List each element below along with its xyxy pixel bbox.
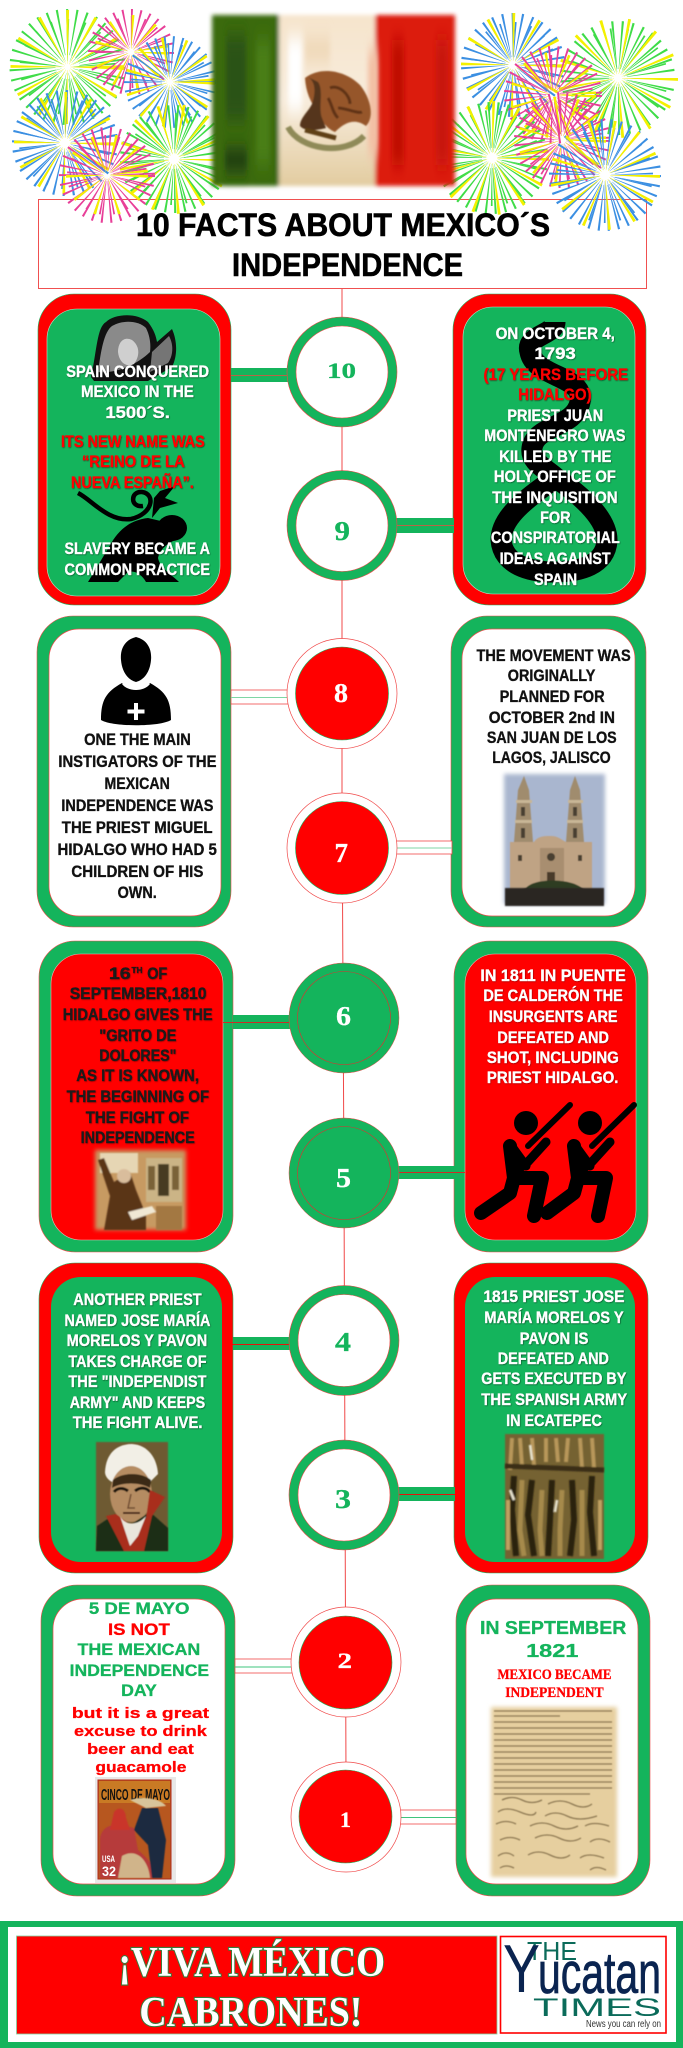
text: Juan Montenegro: CONSPIRATORIAL [491, 529, 620, 547]
image: act of independence document [491, 1707, 617, 1877]
text: Juan Montenegro: THE INQUISITION [492, 489, 618, 507]
text: September 1821: 1821 [526, 1640, 578, 1661]
badge: 5: 5 [336, 1163, 351, 1193]
connector: 1 [394, 1810, 456, 1824]
text: September 1821: IN SEPTEMBER [480, 1617, 626, 1638]
text: Spain conquered: SLAVERY BECAME A [64, 540, 210, 558]
text: Juan Montenegro: 1793 [534, 345, 576, 363]
title box [38, 200, 646, 288]
panel: fact 5 [454, 941, 648, 1252]
text: Juan Montenegro [484, 325, 628, 589]
image: Cinco de Mayo stamp [95, 1777, 176, 1883]
text: 5 de Mayo: excuse to drink [74, 1723, 208, 1740]
text: Grito de Dolores: THE FIGHT OF [86, 1109, 189, 1127]
text: Miguel Hidalgo: INDEPENDENCE WAS [61, 797, 213, 815]
text: Spain conquered: MEXICO IN THE [81, 383, 194, 401]
image: Cinco de Mayo stamp: 32 [102, 1863, 116, 1879]
text: Miguel Hidalgo: OWN. [118, 884, 157, 902]
text: Spain conquered: SPAIN CONQUERED [66, 363, 209, 381]
text: 5 de Mayo: THE MEXICAN [78, 1641, 200, 1659]
panel: fact 9 [453, 294, 646, 605]
connector: 2 [235, 1659, 297, 1673]
text: 5 de Mayo: INDEPENDENCE [70, 1662, 209, 1680]
text: Spain conquered: “REINO DE LA [82, 453, 185, 471]
icon: priest [101, 637, 171, 725]
icon: noose [501, 322, 607, 572]
text: Miguel Hidalgo [58, 731, 217, 902]
panel: fact 1 [456, 1585, 650, 1896]
badge: 10: 10 [327, 358, 356, 383]
text: Morelos takes charge: NAMED JOSE MARÍA [64, 1311, 210, 1330]
text: Morelos takes charge: ARMY" AND KEEPS [70, 1394, 205, 1412]
logo: The Yucatan Times: TIMES [533, 1994, 661, 2022]
text: Morelos takes charge: TAKES CHARGE OF [68, 1353, 207, 1371]
text: Juan Montenegro: KILLED BY THE [499, 448, 612, 466]
text: original plan: ORIGINALLY [508, 667, 595, 685]
badge: 1 [291, 1762, 401, 1872]
text: Miguel Hidalgo: HIDALGO WHO HAD 5 [58, 841, 217, 859]
text: Puente de Calderón: SHOT, INCLUDING [487, 1049, 619, 1067]
text: Juan Montenegro: PRIEST JUAN [507, 407, 603, 425]
text: Miguel Hidalgo: INSTIGATORS OF THE [58, 753, 217, 771]
text: Grito de Dolores: INDEPENDENCE [81, 1129, 195, 1147]
badge: 7 [287, 793, 397, 903]
panel: fact 3 [454, 1263, 648, 1573]
icon: kneeling riflemen [481, 1105, 634, 1216]
image: cathedral of San Juan de los Lagos [504, 774, 605, 906]
text: Puente de Calderón: INSURGENTS ARE [489, 1008, 618, 1026]
text: 5 de Mayo: IS NOT [108, 1621, 170, 1639]
text: original plan: PLANNED FOR [500, 688, 605, 706]
banner: red slogan panel: CABRONES! [139, 1990, 362, 2036]
text: Grito de Dolores: 16 [109, 965, 131, 983]
text: Juan Montenegro: IDEAS AGAINST [500, 550, 611, 568]
text: Morelos executed: MARÍA MORELOS Y [484, 1308, 624, 1327]
badge: 4: 4 [335, 1327, 351, 1357]
text: Juan Montenegro: FOR [540, 509, 571, 527]
text: 5 de Mayo: but it is a great [72, 1705, 209, 1722]
title: 10 FACTS ABOUT MEXICO´S [136, 207, 550, 243]
badge: 8: 8 [334, 678, 348, 708]
text: Morelos executed: GETS EXECUTED BY [481, 1370, 626, 1388]
badge: 3 [289, 1440, 399, 1550]
logo: The Yucatan Times: THE [527, 1936, 577, 1966]
text: Morelos executed [481, 1288, 627, 1430]
image: Hidalgo painting [95, 1150, 186, 1230]
text: Grito de Dolores: SEPTEMBER,1810 [70, 985, 206, 1003]
text: Puente de Calderón [480, 967, 626, 1087]
connector: 7 [393, 841, 452, 854]
connector: 3 [390, 1487, 465, 1501]
badge: 3: 3 [335, 1484, 351, 1514]
text: Puente de Calderón: DE CALDERÓN THE [483, 986, 623, 1005]
badge: 2 [291, 1607, 401, 1717]
connector: 8 [231, 690, 290, 704]
logo: The Yucatan Times [500, 1931, 666, 2033]
text: September 1821 [480, 1617, 626, 1701]
text: original plan: THE MOVEMENT WAS [476, 647, 631, 665]
panel: fact 2 [41, 1585, 235, 1896]
connector: 9 [388, 518, 454, 533]
text: September 1821: MEXICO BECAME [497, 1667, 612, 1683]
text: Juan Montenegro: MONTENEGRO WAS [484, 427, 625, 445]
text: Puente de Calderón: PRIEST HIDALGO. [487, 1069, 618, 1087]
text: Spain conquered: 1500´S. [105, 404, 170, 422]
title [136, 207, 550, 283]
panel: fact 8 [37, 616, 231, 927]
text: Spain conquered [61, 363, 210, 579]
badge: 1: 1 [340, 1807, 351, 1832]
badge: 4 [289, 1286, 399, 1396]
image: painted Mexican flag [212, 15, 455, 186]
text: Miguel Hidalgo: ONE THE MAIN [84, 731, 191, 749]
text: Juan Montenegro: ON OCTOBER 4, [496, 325, 615, 343]
text: Grito de Dolores: AS IT IS KNOWN, [76, 1067, 199, 1085]
badge: 5 [289, 1118, 399, 1228]
logo: The Yucatan Times: Y [503, 1931, 540, 2007]
badge: 9 [287, 470, 397, 580]
connector: 10 [231, 368, 289, 382]
icon: slave and whip [78, 486, 187, 582]
connector: 5 [391, 1166, 465, 1179]
text: Grito de Dolores: HIDALGO GIVES THE [63, 1006, 213, 1024]
text: Morelos executed: IN ECATEPEC [506, 1412, 602, 1430]
text: 5 de Mayo: 5 DE MAYO [89, 1600, 190, 1618]
badge: 8 [287, 638, 397, 748]
text: original plan: SAN JUAN DE LOS [487, 729, 617, 747]
badge: 7: 7 [334, 838, 348, 868]
footer banner [0, 1921, 683, 2048]
badge: 6: 6 [336, 1001, 351, 1031]
fireworks left [32, 27, 206, 202]
text: Morelos executed: PAVON IS [520, 1330, 588, 1348]
text: 5 de Mayo [70, 1600, 209, 1776]
panel: fact 10 [38, 294, 231, 605]
text: 5 de Mayo: beer and eat [87, 1741, 194, 1758]
text: Miguel Hidalgo: CHILDREN OF HIS [71, 863, 203, 881]
text: September 1821: INDEPENDENT [505, 1685, 604, 1701]
text: Spain conquered: COMMON PRACTICE [64, 561, 210, 579]
text: Miguel Hidalgo: MEXICAN [104, 775, 170, 793]
text: Spain conquered: NUEVA ESPAÑA”. [71, 472, 194, 492]
text: Miguel Hidalgo: THE PRIEST MIGUEL [62, 819, 212, 837]
text: Morelos takes charge [64, 1291, 210, 1432]
text: Grito de Dolores [63, 965, 213, 1147]
image: Cinco de Mayo stamp: USA [102, 1854, 115, 1864]
image: Cinco de Mayo stamp: CINCO DE MAYO [101, 1787, 170, 1804]
banner: red slogan panel [16, 1936, 497, 2036]
connector: 6 [223, 1015, 297, 1029]
text: original plan: LAGOS, JALISCO [492, 749, 611, 767]
text: Morelos takes charge: MORELOS Y PAVON [67, 1332, 207, 1350]
text: Grito de Dolores: TH [132, 966, 143, 975]
banner: red slogan panel: ¡VIVA MÉXICO [118, 1939, 385, 1986]
text: Puente de Calderón: DEFEATED AND [497, 1029, 609, 1047]
text: 5 de Mayo: guacamole [95, 1759, 186, 1776]
panel: fact 4 [39, 1263, 233, 1573]
timeline line [342, 289, 346, 1780]
text: Morelos takes charge: THE "INDEPENDIST [68, 1373, 207, 1391]
fireworks right [459, 35, 651, 208]
logo: The Yucatan Times: News you can rely on [586, 2019, 661, 2030]
text: Juan Montenegro: (17 YEARS BEFORE [484, 366, 628, 384]
text: Morelos executed: THE SPANISH ARMY [481, 1391, 627, 1409]
text: 5 de Mayo: DAY [121, 1682, 157, 1700]
text: Grito de Dolores: "GRITO DE [99, 1027, 176, 1045]
icon: conquistador helmet [91, 315, 176, 381]
title: INDEPENDENCE [232, 247, 463, 283]
image: portrait of Morelos [96, 1442, 168, 1551]
text: Morelos takes charge: THE FIGHT ALIVE. [73, 1414, 202, 1432]
badge: 2: 2 [338, 1648, 352, 1673]
text: original plan [476, 647, 631, 767]
image: execution painting [505, 1434, 604, 1559]
text: Morelos executed: DEFEATED AND [498, 1350, 609, 1368]
panel: fact 6 [39, 941, 233, 1252]
text: Juan Montenegro: HOLY OFFICE OF [494, 468, 616, 486]
text: Juan Montenegro: SPAIN [534, 571, 577, 589]
badge: 6 [289, 963, 399, 1073]
panel: fact 7 [451, 616, 646, 927]
text: Juan Montenegro: HIDALGO) [518, 386, 592, 404]
text: Puente de Calderón: IN 1811 IN PUENTE [480, 967, 626, 985]
text: Spain conquered: ITS NEW NAME WAS [61, 433, 205, 451]
text: original plan: OCTOBER 2nd IN [489, 709, 615, 727]
text: Grito de Dolores: THE BEGINNING OF [67, 1088, 209, 1106]
text: Grito de Dolores: DOLORES" [99, 1047, 176, 1065]
badge: 9: 9 [334, 516, 350, 546]
text: Morelos takes charge: ANOTHER PRIEST [73, 1291, 202, 1309]
text: Morelos executed: 1815 PRIEST JOSE [483, 1288, 624, 1306]
connector: 4 [222, 1337, 297, 1350]
text: Grito de Dolores: OF [147, 965, 167, 983]
badge: 10 [287, 317, 397, 427]
